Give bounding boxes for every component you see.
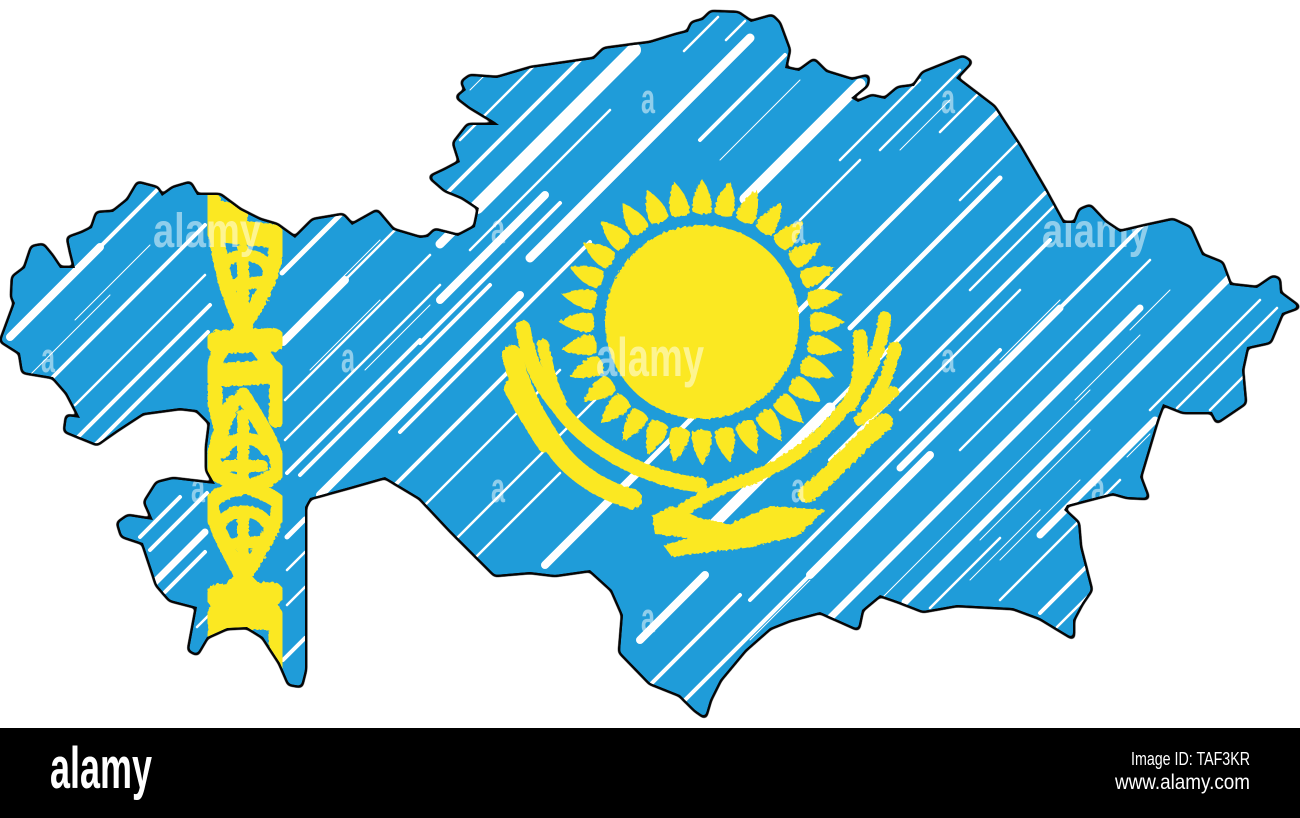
footer logo: alamy [50,736,152,801]
ornament: national pattern band at left [211,200,279,665]
emblem: sun with rays and eagle wreath [511,179,895,557]
wreath: left wing [511,328,700,499]
watermark single letters: a [791,464,805,511]
watermark word right: alamy [1042,205,1150,258]
watermark single letters [41,75,1105,641]
watermark single letters: a [941,75,955,122]
ornament inner motifs [222,250,268,565]
sun disc [605,225,799,419]
watermark single letters: a [491,205,505,252]
watermark single letters: a [941,334,955,381]
watermark single letters: a [191,464,205,511]
ornament bands and top block [216,212,273,618]
watermark single letters: a [941,594,955,641]
watermark single letters: a [791,205,805,252]
watermark single letters: a [1091,464,1105,511]
watermark single letters: a [491,464,505,511]
watermark word centre: alamy [596,326,704,388]
wreath: right wing [677,318,895,515]
footer bar [0,728,1300,818]
watermark single letters: a [41,334,55,381]
watermarks: alamy [41,75,1150,641]
wreath: lower eagle wings [652,506,825,557]
watermark word left: alamy [153,205,261,258]
ornament strands [211,200,279,665]
watermark single letters: a [641,594,655,641]
footer image id: Image ID: TAF3KR [1131,749,1250,769]
watermark single letters: a [341,334,355,381]
sun rays [559,179,845,465]
watermark single letters: a [641,75,655,122]
footer website: www.alamy.com [1114,771,1250,794]
